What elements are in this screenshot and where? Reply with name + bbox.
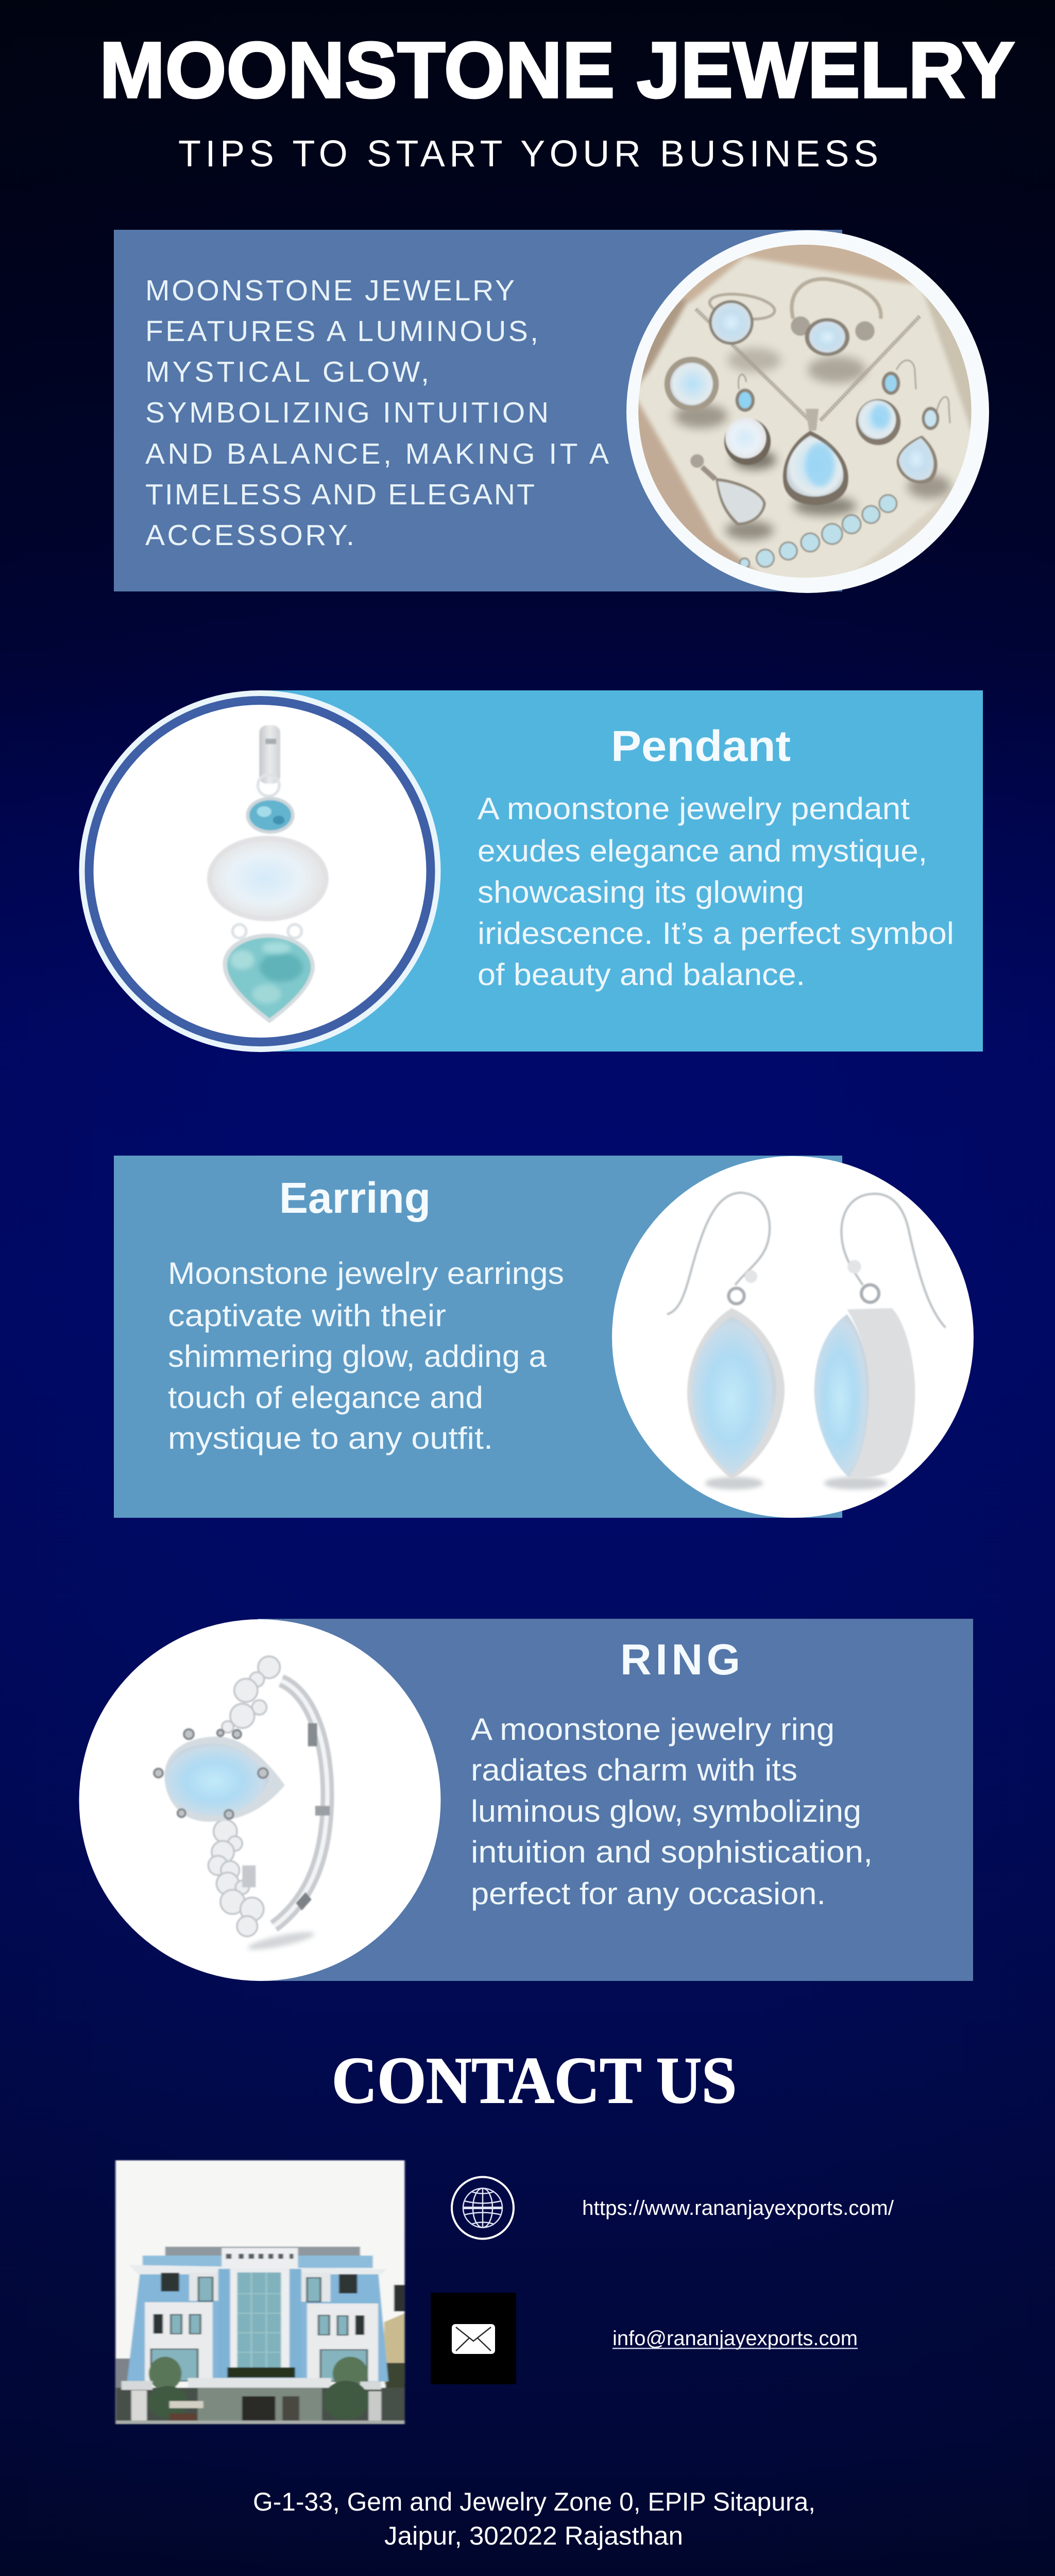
subtitle: TIPS TO START YOUR BUSINESS xyxy=(178,133,878,175)
intro panel background xyxy=(114,230,842,591)
earring text block: captivate with their xyxy=(168,1298,446,1333)
pendant text block: showcasing its glowing xyxy=(478,875,804,909)
website link: https://www.rananjayexports.com/ xyxy=(582,2197,894,2219)
pendant text block: iridescence. It’s a perfect symbol xyxy=(478,916,954,951)
address xyxy=(253,2487,815,2550)
email link: info@rananjayexports.com xyxy=(612,2327,858,2350)
ring photo xyxy=(79,1619,441,1981)
jewelry collection photo xyxy=(626,230,989,593)
earring panel background xyxy=(114,1156,842,1518)
icon: globe xyxy=(452,2177,514,2239)
panel: introduction xyxy=(114,230,989,593)
pendant text block: exudes elegance and mystique, xyxy=(478,834,927,868)
building photo xyxy=(115,2160,405,2424)
ring text block: intuition and sophistication, xyxy=(471,1835,873,1869)
earring text block: shimmering glow, adding a xyxy=(168,1339,547,1374)
pendant heading: Pendant xyxy=(611,722,791,770)
pendant text block xyxy=(478,791,954,992)
intro text block: MOONSTONE JEWELRY xyxy=(145,274,515,307)
panel: earring xyxy=(114,1156,974,1518)
earring text block: Moonstone jewelry earrings xyxy=(168,1256,564,1291)
earring text block xyxy=(168,1256,564,1455)
intro text block: AND BALANCE, MAKING IT A xyxy=(145,437,609,470)
earring photo xyxy=(612,1156,974,1518)
contact heading: CONTACT US xyxy=(332,2044,737,2117)
ring text block: perfect for any occasion. xyxy=(471,1876,826,1911)
ring text block xyxy=(471,1712,873,1911)
intro text block xyxy=(145,274,609,552)
intro text block: FEATURES A LUMINOUS, xyxy=(145,315,538,348)
intro text block: TIMELESS AND ELEGANT xyxy=(145,478,535,511)
intro text block: ACCESSORY. xyxy=(145,519,354,552)
title: MOONSTONE JEWELRY xyxy=(99,26,1015,114)
earring text block: mystique to any outfit. xyxy=(168,1421,493,1455)
address: Jaipur, 302022 Rajasthan xyxy=(384,2521,683,2550)
panel: ring xyxy=(79,1619,973,1981)
address: G-1-33, Gem and Jewelry Zone 0, EPIP Sitapura, xyxy=(253,2487,815,2516)
pendant text block: A moonstone jewelry pendant xyxy=(478,791,910,826)
pendant panel background xyxy=(258,690,983,1052)
pendant photo xyxy=(79,690,441,1052)
ring panel background xyxy=(258,1619,973,1981)
pendant text block: of beauty and balance. xyxy=(478,957,805,992)
panel: pendant xyxy=(79,690,983,1052)
earring heading: Earring xyxy=(279,1174,431,1222)
ring text block: radiates charm with its xyxy=(471,1753,797,1787)
ring text block: luminous glow, symbolizing xyxy=(471,1794,861,1828)
icon: email envelope xyxy=(431,2293,516,2384)
intro text block: MYSTICAL GLOW, xyxy=(145,355,429,388)
intro text block: SYMBOLIZING INTUITION xyxy=(145,396,549,429)
ring heading: RING xyxy=(620,1635,740,1684)
earring text block: touch of elegance and xyxy=(168,1380,483,1415)
ring text block: A moonstone jewelry ring xyxy=(471,1712,835,1747)
